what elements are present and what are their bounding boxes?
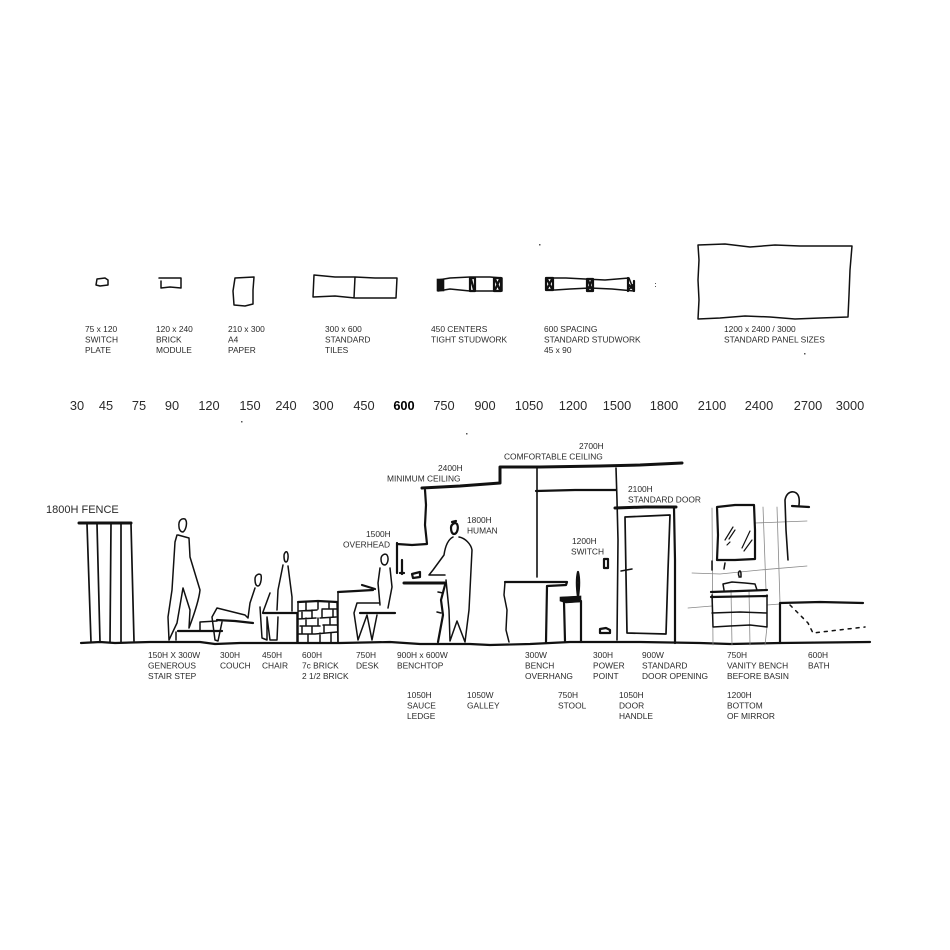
icon: standard studwork bbox=[546, 278, 634, 291]
label: A4 paper: 210 x 300 bbox=[228, 324, 265, 334]
label: A4 paper: A4 bbox=[228, 334, 239, 344]
label: vanity bench: 750H bbox=[727, 650, 747, 660]
section labels above bbox=[46, 441, 701, 556]
icon: A4 paper bbox=[233, 277, 254, 306]
label: benchtop: BENCHTOP bbox=[397, 660, 444, 670]
label: door opening: STANDARD bbox=[642, 660, 687, 670]
label: standard studwork: 600 SPACING bbox=[544, 324, 597, 334]
dimension scale row: 600 bbox=[393, 398, 415, 413]
label: mirror: OF MIRROR bbox=[727, 711, 775, 721]
label: switch: SWITCH bbox=[571, 546, 604, 556]
icon: standard tiles bbox=[313, 275, 397, 298]
module sketches row bbox=[96, 244, 852, 319]
dimension scale row: 150 bbox=[239, 398, 261, 413]
label: human: 1800H bbox=[467, 515, 492, 525]
section labels below bbox=[148, 650, 830, 721]
label: comfortable ceiling: 2700H bbox=[579, 441, 604, 451]
label: door opening: 900W bbox=[642, 650, 664, 660]
icon: tight studwork bbox=[437, 277, 502, 291]
dimension scale row: 3000 bbox=[836, 398, 864, 413]
dimension scale row: 450 bbox=[353, 398, 375, 413]
dimension scale row: 1800 bbox=[650, 398, 678, 413]
dimension scale row bbox=[70, 398, 864, 413]
label: brick module: MODULE bbox=[156, 345, 192, 355]
label: standard studwork: 45 x 90 bbox=[544, 345, 572, 355]
label: standard tiles: STANDARD bbox=[325, 334, 370, 344]
label: panel sizes: STANDARD PANEL SIZES bbox=[724, 334, 825, 344]
fence bbox=[79, 523, 134, 642]
label: comfortable ceiling: COMFORTABLE CEILING bbox=[504, 452, 603, 462]
label: standard studwork: STANDARD STUDWORK bbox=[544, 334, 641, 344]
label: power point: POWER bbox=[593, 660, 625, 670]
label: stair step: STAIR STEP bbox=[148, 671, 197, 681]
stool bbox=[560, 572, 581, 642]
dimension scale row: 75 bbox=[132, 398, 146, 413]
label: panel sizes: 1200 x 2400 / 3000 bbox=[724, 324, 796, 334]
standing person on step bbox=[168, 519, 200, 640]
dimension scale row: 1200 bbox=[559, 398, 587, 413]
label: door handle: HANDLE bbox=[619, 711, 653, 721]
label: chair: CHAIR bbox=[262, 660, 288, 670]
label: brick: 7c BRICK bbox=[302, 660, 339, 670]
label: power point: POINT bbox=[593, 671, 619, 681]
dimension scale row: 300 bbox=[312, 398, 334, 413]
label: bench overhang: 300W bbox=[525, 650, 547, 660]
dimension scale row: 2100 bbox=[698, 398, 726, 413]
label: fence: 1800H FENCE bbox=[46, 504, 119, 516]
label: vanity bench: VANITY BENCH bbox=[727, 660, 788, 670]
desk with seated person bbox=[338, 554, 395, 642]
label: minimum ceiling: MINIMUM CEILING bbox=[387, 474, 461, 484]
dimension scale row: 45 bbox=[99, 398, 113, 413]
dimension scale row: 240 bbox=[275, 398, 297, 413]
shower bbox=[785, 492, 809, 560]
label: power point: 300H bbox=[593, 650, 613, 660]
label: overhead: 1500H bbox=[366, 529, 391, 539]
label: mirror: 1200H bbox=[727, 690, 752, 700]
label: switch plate: 75 x 120 bbox=[85, 324, 117, 334]
icon: wall switch bbox=[604, 559, 608, 568]
bathroom tile lines bbox=[688, 507, 807, 645]
label: desk: DESK bbox=[356, 660, 379, 670]
label: standard door: 2100H bbox=[628, 484, 653, 494]
label: standard door: STANDARD DOOR bbox=[628, 494, 701, 504]
label: stool: 750H bbox=[558, 690, 578, 700]
door bbox=[615, 507, 676, 643]
label: stool: STOOL bbox=[558, 700, 587, 710]
dimension scale row: 30 bbox=[70, 398, 84, 413]
bench with overhang bbox=[504, 582, 567, 642]
module labels bbox=[85, 324, 825, 355]
label: minimum ceiling: 2400H bbox=[438, 463, 463, 473]
label: brick module: BRICK bbox=[156, 334, 182, 344]
label: bench overhang: OVERHANG bbox=[525, 671, 573, 681]
icon: standard panel bbox=[698, 244, 852, 319]
label: A4 paper: PAPER bbox=[228, 345, 256, 355]
label: couch: 300H bbox=[220, 650, 240, 660]
dimension scale row: 2700 bbox=[794, 398, 822, 413]
label: mirror: BOTTOM bbox=[727, 700, 763, 710]
mirror bbox=[717, 505, 755, 560]
bath bbox=[780, 602, 865, 643]
label: tight studwork: 450 CENTERS bbox=[431, 324, 487, 334]
dimension scale row: 120 bbox=[198, 398, 220, 413]
label: benchtop: 900H x 600W bbox=[397, 650, 448, 660]
label: sauce ledge: LEDGE bbox=[407, 711, 436, 721]
label: sauce ledge: SAUCE bbox=[407, 700, 436, 710]
label: vanity bench: BEFORE BASIN bbox=[727, 671, 789, 681]
label: switch: 1200H bbox=[572, 536, 597, 546]
benchtop bbox=[404, 583, 445, 642]
label: brick: 600H bbox=[302, 650, 322, 660]
label: brick module: 120 x 240 bbox=[156, 324, 193, 334]
label: door handle: 1050H bbox=[619, 690, 644, 700]
label: desk: 750H bbox=[356, 650, 376, 660]
label: overhead: OVERHEAD bbox=[343, 540, 390, 550]
vanity basin and tap bbox=[711, 561, 767, 627]
icon: switch plate bbox=[96, 278, 108, 286]
label: brick: 2 1/2 BRICK bbox=[302, 671, 349, 681]
label: standard tiles: TILES bbox=[325, 345, 349, 355]
label: bath: 600H bbox=[808, 650, 828, 660]
label: chair: 450H bbox=[262, 650, 282, 660]
label: switch plate: SWITCH bbox=[85, 334, 118, 344]
label: bath: BATH bbox=[808, 660, 830, 670]
label: door opening: DOOR OPENING bbox=[642, 671, 708, 681]
icon: power point bbox=[600, 628, 610, 633]
icon: brick module bbox=[159, 278, 181, 288]
label: tight studwork: TIGHT STUDWORK bbox=[431, 334, 508, 344]
label: galley: GALLEY bbox=[467, 700, 500, 710]
chair with seated person bbox=[260, 552, 297, 643]
label: switch plate: PLATE bbox=[85, 345, 111, 355]
standing human at bench bbox=[429, 521, 472, 642]
dimension scale row: 2400 bbox=[745, 398, 773, 413]
dimension scale row: 900 bbox=[474, 398, 496, 413]
label: sauce ledge: 1050H bbox=[407, 690, 432, 700]
label: standard tiles: 300 x 600 bbox=[325, 324, 362, 334]
label: stair step: 150H X 300W bbox=[148, 650, 200, 660]
label: galley: 1050W bbox=[467, 690, 494, 700]
wall partitions bbox=[536, 467, 618, 640]
brick wall bbox=[298, 601, 338, 643]
dimension scale row: 750 bbox=[433, 398, 455, 413]
section drawing bbox=[79, 463, 870, 645]
label: door handle: DOOR bbox=[619, 700, 644, 710]
dimension scale row: 1050 bbox=[515, 398, 543, 413]
label: stair step: GENEROUS bbox=[148, 660, 196, 670]
dimension scale row: 90 bbox=[165, 398, 179, 413]
label: bench overhang: BENCH bbox=[525, 660, 554, 670]
couch with seated person bbox=[200, 574, 261, 641]
label: human: HUMAN bbox=[467, 526, 498, 536]
dimension scale row: 1500 bbox=[603, 398, 631, 413]
ceiling outline bbox=[397, 463, 682, 573]
label: couch: COUCH bbox=[220, 660, 251, 670]
sauce ledge and items bbox=[400, 560, 420, 578]
stair step bbox=[176, 631, 222, 640]
ground line bbox=[81, 642, 870, 645]
